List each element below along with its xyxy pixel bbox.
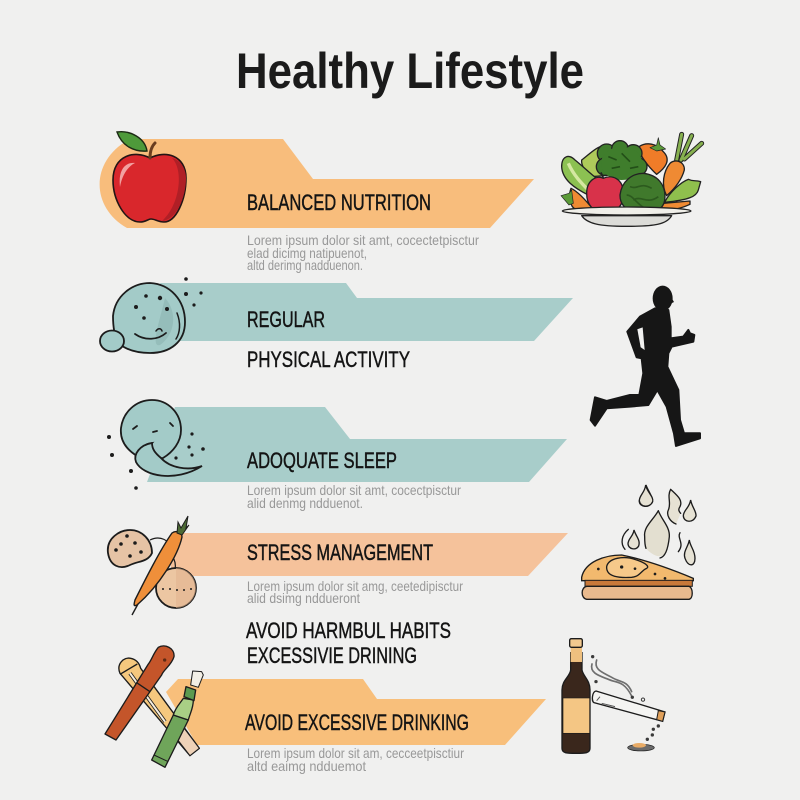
text block: nutrition description xyxy=(247,232,479,273)
icon: potato, carrot and onion xyxy=(108,516,196,615)
text block: nutrition description: elad dicimg natipuenot, xyxy=(247,245,367,261)
text block: nutrition description: altd derimg nadduenon. xyxy=(247,257,363,273)
banner: orange xyxy=(166,679,546,745)
panel: regular physical activity xyxy=(160,283,573,372)
text block: drinking description: altd eaimg ndduemot xyxy=(247,758,366,774)
heading: balanced nutrition: BALANCED NUTRITION xyxy=(247,190,431,215)
text block: drinking description xyxy=(247,745,464,774)
text block: sleep description: Lorem ipsum dolor sit amt, cocectpisctur xyxy=(247,482,461,498)
heading: adequate sleep: ADOQUATE SLEEP xyxy=(247,448,397,473)
icon: crossed rolling pin and green bottle xyxy=(105,646,203,767)
heading: avoid excessive drinking: AVOID EXCESSIVE DRINKING xyxy=(245,710,469,735)
icon: sleeping moon xyxy=(107,400,205,490)
panel: balanced nutrition xyxy=(100,139,534,273)
text block: sleep description: alid denmg ndduenot. xyxy=(247,495,363,511)
panel: stress management xyxy=(170,533,568,606)
text block: stress description: alid dsimg nddueront xyxy=(247,590,360,606)
panel: avoid excessive drinking xyxy=(166,679,546,774)
heading: physical activity: PHYSICAL ACTIVITY xyxy=(247,347,410,372)
text block: stress description xyxy=(247,578,463,606)
text block: drinking description: Lorem ipsum dolor sit am, cecceetpisctiur xyxy=(247,745,464,761)
icon: round teal character xyxy=(100,277,203,353)
text block: stress description: Lorem ipsum dolor sit amg, ceetedipisctur xyxy=(247,578,463,594)
icon: running silhouette xyxy=(591,286,700,446)
text block: sleep description xyxy=(247,482,461,511)
heading: avoid harmful habits: AVOID HARMBUL HABITS xyxy=(246,618,451,643)
banner: teal xyxy=(147,407,567,482)
banner: peach xyxy=(170,533,568,576)
text block: nutrition description: Lorem ipsum dolor sit amt, cocectetpisctur xyxy=(247,232,479,248)
icon: vegetable plate xyxy=(561,134,702,226)
icon: bottle and cigarette xyxy=(562,639,665,753)
banner: teal xyxy=(160,283,573,341)
heading: avoid harmful habits: EXCESSIVIE DRINING xyxy=(247,643,417,668)
icon: rising steam xyxy=(639,485,696,565)
heading: avoid harmful habits xyxy=(246,618,451,668)
heading: regular: REGULAR xyxy=(247,307,325,332)
title: Healthy Lifestyle xyxy=(236,43,584,99)
icon: sandwich xyxy=(582,485,693,599)
icon: red apple xyxy=(113,132,186,222)
panel: adequate sleep xyxy=(147,407,567,511)
banner: orange xyxy=(100,139,534,228)
heading: stress management: STRESS MANAGEMENT xyxy=(247,540,433,565)
